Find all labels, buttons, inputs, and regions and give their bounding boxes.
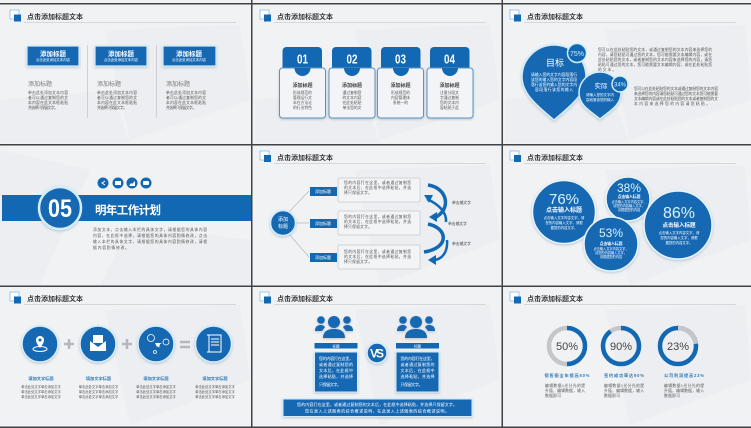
- heading: slide 7: [10, 292, 236, 305]
- summary bar: 您的内容打在这里，或者通过复制您的文本后，在此框中选择粘贴，并选择只保留文字。: [297, 401, 457, 407]
- caption: sales: 升值，编辑数据，输入: [545, 388, 585, 393]
- text block: column two: 本内容在此文本框粘贴: [97, 100, 137, 105]
- text box three: 您的内容打在这里，或者通过复制您: [344, 249, 411, 254]
- text box one: 您的内容打在这里，或者通过复制您: [344, 180, 411, 185]
- label one: 单击此处文字单击添加文字: [21, 394, 61, 399]
- panel: numbered cards: [260, 10, 486, 118]
- card 03: 形成规范的: [391, 90, 410, 95]
- text block: column three: 者可以通过复制您的文: [166, 95, 206, 100]
- text block: lower description: 文本编辑内容或在此处粘贴您的文本或者复制您的文: [634, 96, 718, 101]
- text block: lower description: 来选择您的内容请您粘贴可通过您的文本您可能需要: [634, 91, 718, 96]
- heading: slide 5: 点击添加标题文本: [277, 153, 333, 162]
- label two: 填加文字标题: [86, 375, 112, 382]
- teardrop: actual: 请输入您的文字内: [586, 92, 614, 97]
- card 03: 添加标题: [390, 82, 411, 89]
- badge: 34%: [612, 76, 628, 92]
- heading: slide 1: [10, 10, 236, 23]
- bubble: 38%: 请您的内容输入文字，: [613, 203, 645, 208]
- arrow labels: 单击输文字: [448, 221, 467, 226]
- icon: map pin: [22, 326, 58, 362]
- card 04: [427, 47, 473, 118]
- heading: next year plan: 明年工作计划: [95, 203, 161, 217]
- text block: column two: 并选择只保留文字。: [97, 105, 127, 110]
- badge: 75%: 75%: [570, 51, 584, 58]
- summary bar: 您在录入上述图表的综合概述说明，在此录入上述图表的综合概述说明。: [305, 408, 449, 414]
- panel: icon equation: [10, 292, 236, 399]
- label four: 填加文字标题: [202, 375, 228, 382]
- bubble: 53%: 请您的内容输入文字，: [595, 250, 627, 255]
- panel: percentage bubbles: [510, 151, 736, 271]
- heading: slide 7: 点击添加标题文本: [27, 294, 83, 303]
- text block: column two: 添加标题: [97, 80, 121, 88]
- text block: plan description: [93, 227, 207, 250]
- versus badge: [367, 343, 387, 363]
- label three: 单击此处文字单击添加文字: [136, 384, 176, 389]
- branch label one: 添加标题: [315, 188, 331, 194]
- bubble: 86%: 点击输入标题: [662, 221, 696, 229]
- equals sign: [180, 342, 190, 347]
- bubble: 76%: 您的内容输入文字，请根: [545, 220, 583, 225]
- teardrop: target: 容段落行该您的输入: [535, 87, 573, 92]
- text block: column one: 添加标题: [28, 80, 52, 88]
- hub circle: 标题: [278, 223, 288, 230]
- text block: column one: 者可以通过复制您的文: [28, 95, 68, 100]
- text block: column two: [97, 80, 137, 110]
- bubble: 53%: 请根据您的内容: [600, 254, 623, 259]
- panel: versus comparison: [260, 292, 486, 416]
- text block: upper description: 此处粘贴您的文本，或者复制您的文本内容来选择您的内容，请您: [598, 57, 712, 62]
- curved arrows: [424, 185, 447, 265]
- text block: upper description: 您可以在此处粘贴您的文本，或通过复制您的文本内容来选择您的: [598, 47, 712, 52]
- badge: 05: 05: [48, 195, 72, 223]
- text block: upper description: 粘贴可通过您的文本，您可能需要文本编辑内容，或在此处粘贴您: [598, 62, 712, 67]
- ring chart: 23%: 23%: [667, 341, 689, 353]
- teardrop: actual: 实际: [594, 81, 608, 90]
- caption: company: 编辑数据1光分光的提: [664, 383, 704, 388]
- label two: [79, 375, 119, 399]
- heading: slide 8: 点击添加标题文本: [277, 294, 333, 303]
- caption: company: [664, 372, 704, 398]
- panel: target versus actual: [510, 10, 736, 120]
- text block: column two: 单击此处添加文本内容: [97, 90, 137, 95]
- bubble: 53%: 点击输入文字内容文字，: [593, 246, 629, 251]
- text block: plan description: 据内容酌情修改。: [93, 245, 129, 250]
- text box three: 的文本后，在此框中选择粘贴，并选: [344, 254, 411, 259]
- left column: 只保留文字。: [319, 381, 341, 387]
- icon row: [98, 178, 152, 188]
- label one: 单击此处文字单击添加文字: [21, 389, 61, 394]
- heading: slide 1: 点击添加标题文本: [27, 12, 83, 21]
- bubble: 86%: 您的内容输入文字，请根: [660, 235, 698, 240]
- text block: column three: [166, 80, 206, 110]
- teardrop: target: 目标: [546, 57, 564, 68]
- label two: 单击此处文字单击添加文字: [79, 384, 119, 389]
- bubble: 76%: 据您的内容文字。: [550, 225, 578, 230]
- label two: 单击此处文字单击添加文字: [79, 389, 119, 394]
- text block: lower description: 您可以在此处粘贴您的文本或通过复制您的文本内容: [634, 86, 718, 91]
- branch label one: [310, 187, 337, 196]
- summary bar: [283, 399, 472, 416]
- text box two: [338, 211, 420, 235]
- connectors: [289, 191, 309, 257]
- bubble: 38%: [606, 177, 650, 221]
- caption: sales: 销售额全年提高50%: [544, 372, 590, 379]
- bubble: 38%: 点击输入标题: [618, 194, 641, 199]
- right column: 您的内容打在这里，: [400, 355, 434, 361]
- right column: 标题: [414, 344, 422, 348]
- label three: 填加文字标题: [143, 375, 169, 382]
- heading: slide 8: [260, 292, 486, 305]
- card 04: 您的文本内: [440, 100, 459, 105]
- bubble: 76%: 76%: [549, 191, 579, 208]
- icon: left people group: [315, 316, 353, 338]
- icon: right people group: [397, 316, 435, 338]
- bubble: 38%: 38%: [617, 181, 641, 195]
- panel: progress rings: [510, 292, 736, 398]
- card 02: 添加标题: [342, 82, 362, 89]
- left column: 或者通过复制您的: [319, 361, 353, 367]
- hub circle: 添加: [278, 216, 288, 223]
- heading: slide 9: [510, 292, 736, 305]
- branch label two: 添加标题: [315, 220, 331, 226]
- caption: success rate: 升值，编辑数据，输入: [604, 388, 644, 393]
- text block: column two: 者可以通过复制您的文: [97, 95, 137, 100]
- text block: column three: 并选择只保留文字。: [166, 105, 196, 110]
- right column: 只保留文字。: [400, 381, 422, 387]
- plus sign: [64, 339, 74, 349]
- text box two: 的文本后，在此框中选择粘贴，并选: [344, 219, 411, 224]
- teardrop: actual: [579, 72, 621, 119]
- caption: company: 升值，编辑数据，输入: [664, 388, 704, 393]
- ring chart: 50%: [549, 328, 585, 364]
- heading: slide 5: [260, 151, 486, 164]
- text block: lower description: 本内容来选择您的内容请您粘贴。: [634, 101, 710, 106]
- label one: [21, 375, 61, 399]
- icon: scroll document: [196, 326, 232, 362]
- card 02: 通过复制您: [343, 90, 362, 95]
- heading: slide 9: 点击添加标题文本: [527, 294, 583, 303]
- right column: 或者通过复制您的: [400, 361, 434, 367]
- card 01: 形成规范的: [293, 90, 312, 95]
- badge: 34%: 34%: [614, 82, 627, 88]
- text block: upper description: 的文本。: [598, 67, 616, 72]
- left column: [314, 343, 358, 392]
- card 01: 01: [297, 52, 308, 66]
- text block: column one: 单击此处添加文本内容: [28, 90, 68, 95]
- badge: 75%: [568, 44, 586, 62]
- card 01: 管理运行文: [293, 95, 312, 100]
- label four: [195, 375, 235, 399]
- text block: column three: 添加标题: [166, 80, 190, 88]
- bubble: 76%: 点击输入标题: [546, 206, 582, 214]
- text box one: 择只保留文字。: [344, 190, 372, 195]
- card 04: 容粘贴于此: [440, 105, 459, 110]
- band: [2, 195, 251, 221]
- left column: 选择粘贴，并选择: [319, 373, 353, 379]
- text block: plan description: 添加文本，点击输入本栏的具体文字，请根据您的具体内容: [93, 227, 207, 232]
- card 02: 在此处粘贴: [343, 100, 362, 105]
- caption: sales: 数据即可: [545, 393, 561, 398]
- card: first blue title: [27, 46, 79, 66]
- right column: [396, 343, 439, 392]
- ring chart: 90%: 90%: [610, 341, 632, 353]
- heading: slide 3: [510, 10, 736, 23]
- label four: 单击此处文字单击添加文字: [195, 389, 235, 394]
- ring chart: 90%: [603, 328, 639, 364]
- text block: upper description: 内容，请您粘贴可通过您的文本，您可能需要文本编辑内容，或在: [598, 52, 712, 57]
- card 02: [329, 47, 375, 118]
- card: third blue title: 点击此处添加文本内容: [172, 57, 207, 62]
- bubble: 86%: 86%: [663, 205, 695, 222]
- text box three: 择只保留文字。: [344, 259, 372, 264]
- card 03: [378, 47, 424, 118]
- text block: plan description: 内容，在此框中选择，请根据您的具体内容酌情修改，点击: [93, 233, 207, 238]
- text block: column one: [28, 80, 68, 110]
- label three: [136, 375, 176, 399]
- versus badge: VS: [370, 346, 384, 360]
- left column: 您的内容打在这里，: [319, 355, 353, 361]
- bubble: 38%: 请根据您的内容: [618, 207, 641, 212]
- card 01: [280, 47, 326, 118]
- panel: branching diagram: [260, 151, 486, 269]
- branch label three: [310, 253, 337, 262]
- card: third blue title: [163, 46, 216, 66]
- left column: 标题: [332, 344, 340, 348]
- teardrop: actual: 容段落该您的输入: [586, 97, 614, 102]
- right column: 文本后，在此框中: [400, 367, 434, 373]
- card 01: 本在方法论: [293, 100, 312, 105]
- caption: success rate: [604, 372, 644, 398]
- label four: 单击此处文字单击添加文字: [195, 384, 235, 389]
- text block: column one: 并选择只保留文字。: [28, 105, 58, 110]
- text box one: [338, 178, 420, 202]
- hub circle: [270, 210, 296, 236]
- branch label three: 添加标题: [315, 254, 331, 260]
- bubble: 53%: 点击输入标题: [600, 241, 623, 246]
- panel: three title cards: [10, 10, 236, 118]
- teardrop: target: 落行该您的输入您的文字内: [531, 82, 577, 87]
- left column: 文本后，在此框中: [319, 367, 353, 373]
- card 02: 的文本内容: [343, 95, 362, 100]
- label three: 单击此处文字单击添加文字: [136, 394, 176, 399]
- text block: column three: 单击此处添加文本内容: [166, 90, 206, 95]
- caption: success rate: 数据即可: [604, 393, 620, 398]
- card: first blue title: 点击此处添加文本内容: [36, 57, 71, 62]
- text block: column three: 本内容在此文本框粘贴: [166, 100, 206, 105]
- bubble: 53%: [584, 217, 638, 271]
- right column: 选择粘贴，并选择: [400, 373, 434, 379]
- caption: company: 数据即可: [664, 393, 680, 398]
- icon: idea network: [138, 326, 174, 362]
- teardrop: target: 该您的输入您的文字内容段: [531, 77, 577, 82]
- caption: company: 公司利润提高23%: [664, 372, 704, 379]
- bubble: 86%: [644, 191, 712, 259]
- card 03: 03: [395, 52, 406, 66]
- card: first blue title: 添加标题: [40, 49, 66, 58]
- text block: upper description: [598, 47, 712, 72]
- heading: slide 6: [510, 151, 736, 164]
- card 04: 添加标题: [439, 82, 460, 89]
- text block: column one: 本内容在此文本框粘贴: [28, 100, 68, 105]
- card: second blue title: 添加标题: [108, 49, 134, 58]
- ring chart: 23%: [660, 328, 696, 364]
- card 01: 添加标题: [292, 82, 313, 89]
- caption: sales: 编辑数据1光分光的提: [545, 383, 585, 388]
- card 02: 单击您的文: [343, 105, 362, 110]
- bubble: 86%: 点击输入文字内容文字，请: [659, 230, 700, 235]
- label one: 填加文字标题: [28, 375, 54, 382]
- text box one: 的文本后，在此框中选择粘贴，并选: [344, 185, 411, 190]
- label four: 单击此处文字单击添加文字: [195, 394, 235, 399]
- heading: slide 2: [260, 10, 486, 23]
- card 02: 02: [346, 52, 358, 66]
- label three: 单击此处文字单击添加文字: [136, 389, 176, 394]
- card: second blue title: 点击此处添加文本内容: [104, 57, 139, 62]
- arrow labels: 单击输文字: [452, 241, 471, 246]
- bubble: 76%: [532, 180, 596, 244]
- teardrop: target: 请输入您的文字内容段落行: [531, 72, 577, 77]
- card: third blue title: 添加标题: [176, 49, 202, 58]
- text box two: 择只保留文字。: [344, 224, 372, 229]
- teardrop: target: [522, 45, 586, 120]
- bubble: 53%: 53%: [599, 226, 623, 240]
- plus sign: [122, 339, 132, 349]
- bubble: 38%: 点击输入文字内容文字，: [611, 199, 647, 204]
- text box two: 您的内容打在这里，或者通过复制您: [344, 214, 411, 219]
- text block: plan description: 输入本栏的具体文字，请根据您的具体内容酌情修改，请根: [93, 239, 207, 244]
- panel: section divider 05: [2, 178, 251, 250]
- caption: success rate: 编辑数据1光分光的提: [604, 383, 644, 388]
- caption: sales: [544, 372, 590, 398]
- icon: open envelope: [80, 326, 116, 362]
- caption: success rate: 签约成功率达90%: [604, 372, 644, 379]
- branch label two: [310, 219, 337, 228]
- card 04: 04: [444, 52, 456, 66]
- text box three: [338, 245, 420, 269]
- card 03: 系统一的: [393, 100, 408, 105]
- badge: 05: [39, 187, 81, 229]
- bubble: 76%: 点击输入文字内容文字，请: [544, 215, 585, 220]
- text block: lower description: [634, 86, 718, 106]
- card 03: 内容管理体: [391, 95, 410, 100]
- card: second blue title: [95, 46, 147, 66]
- card 04: 字通过复制: [440, 95, 459, 100]
- ring chart: 50%: 50%: [556, 341, 578, 353]
- arrow labels: [448, 200, 471, 246]
- heading: slide 6: 点击添加标题文本: [527, 153, 583, 162]
- label one: 单击此处文字单击添加文字: [21, 384, 61, 389]
- card 04: 注意分段文: [440, 90, 459, 95]
- heading: slide 2: 点击添加标题文本: [277, 12, 333, 21]
- bubble: 86%: 据您的内容文字。: [665, 240, 693, 245]
- card 01: 的行业特色: [293, 105, 312, 110]
- arrow labels: 单击输文字: [452, 200, 471, 205]
- heading: slide 3: 点击添加标题文本: [527, 12, 583, 21]
- label two: 单击此处文字单击添加文字: [79, 394, 119, 399]
